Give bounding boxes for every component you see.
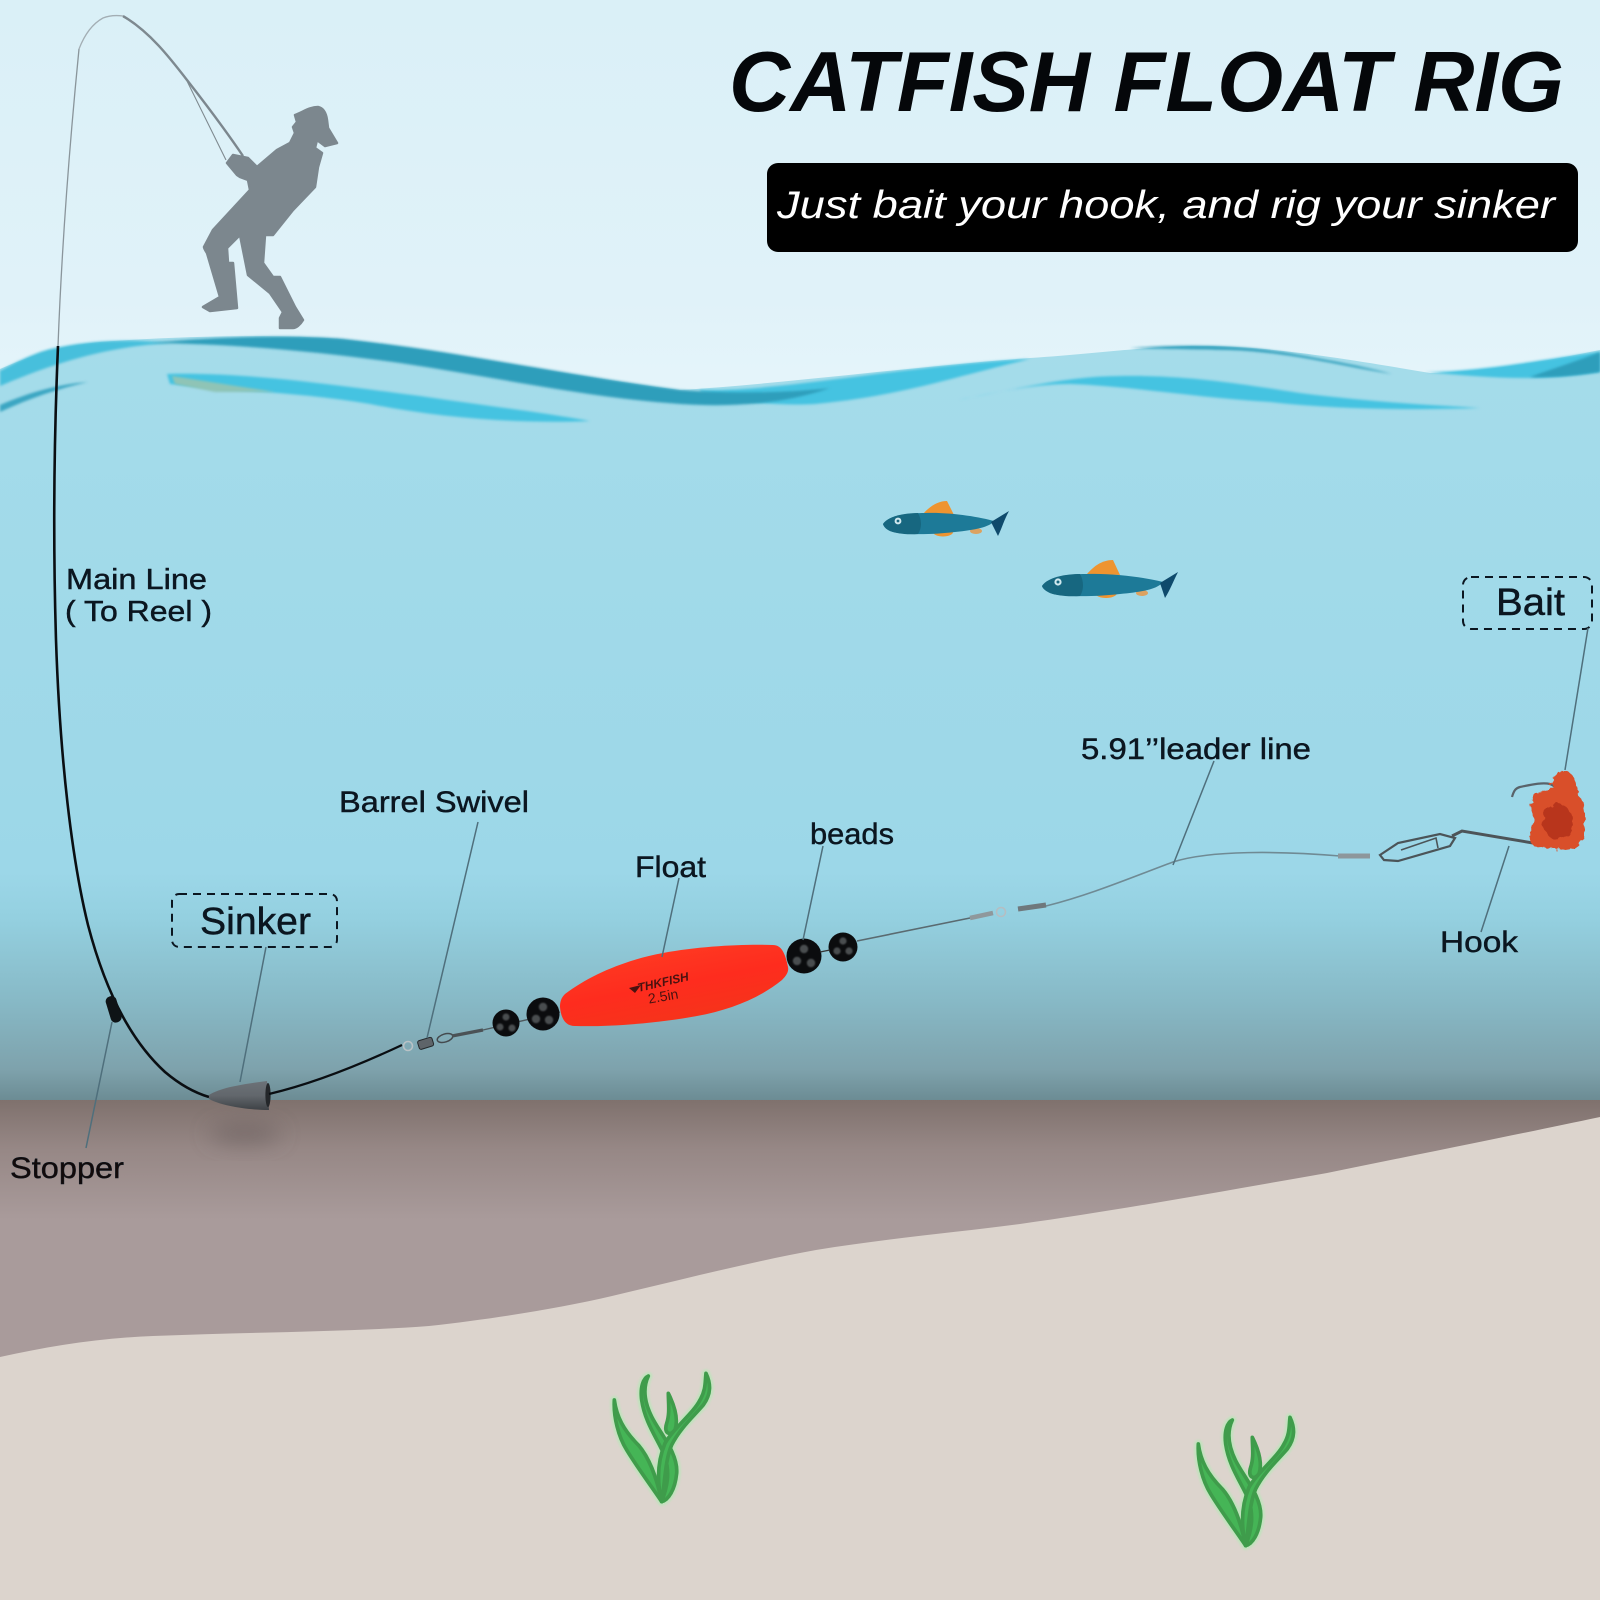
barrel swivel — [404, 1012, 560, 1050]
label: main line: ( To Reel ) — [65, 596, 212, 628]
seaweed left — [614, 1373, 710, 1502]
float: 2.5in — [647, 986, 679, 1007]
fish 1 — [883, 501, 1009, 536]
label: float — [635, 851, 707, 957]
label: main line — [65, 564, 212, 628]
stopper — [104, 995, 123, 1024]
label: beads — [803, 818, 894, 940]
label: bait — [1463, 577, 1592, 770]
sinker shadow — [209, 1125, 281, 1143]
line from sinker to swivel — [269, 1045, 402, 1094]
subtitle banner — [767, 163, 1578, 252]
fishing rod — [58, 16, 243, 346]
snap and hook — [1380, 783, 1559, 861]
beads lower — [492, 998, 560, 1036]
icon: fisherman silhouette — [203, 107, 337, 328]
label: float: Float — [635, 851, 707, 884]
waves — [0, 337, 1600, 422]
seaweed right — [1198, 1417, 1294, 1546]
label: sinker: Sinker — [200, 901, 311, 943]
title: CATFISH FLOAT RIG — [729, 35, 1564, 130]
label: sinker — [172, 894, 337, 1082]
label: hook — [1440, 846, 1519, 959]
label: main line: Main Line — [66, 564, 207, 596]
label: beads: beads — [810, 818, 894, 851]
sky background — [0, 0, 1600, 420]
label: stopper: Stopper — [10, 1152, 124, 1185]
subtitle banner: Just bait your hook, and rig your sinker — [776, 184, 1557, 227]
label: bait: Bait — [1496, 582, 1565, 624]
label: leader line: 5.91’’leader line — [1081, 733, 1311, 766]
label: barrel swivel: Barrel Swivel — [339, 786, 529, 819]
beads upper — [786, 932, 858, 974]
float — [560, 945, 788, 1026]
label: leader line — [1081, 733, 1311, 865]
label: stopper — [10, 1022, 124, 1185]
sand — [0, 1117, 1600, 1600]
bait — [1529, 771, 1585, 850]
main line — [54, 346, 209, 1097]
fish 2 — [1042, 560, 1178, 598]
leader line — [857, 852, 1370, 941]
float: THKFISH — [636, 969, 690, 995]
label: hook: Hook — [1440, 926, 1519, 959]
water body — [0, 336, 1600, 1100]
label: barrel swivel — [339, 786, 529, 1038]
seabed — [0, 1100, 1600, 1380]
sinker — [209, 1081, 271, 1110]
